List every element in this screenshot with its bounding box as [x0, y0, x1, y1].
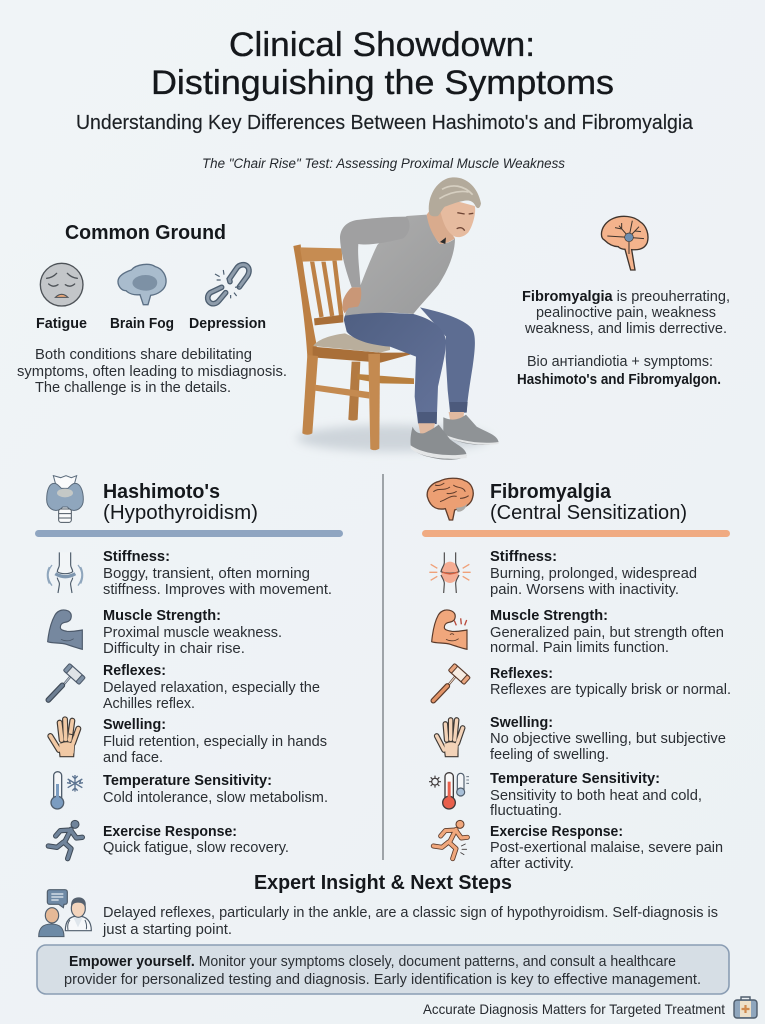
- icon: thyroid: [47, 476, 83, 522]
- heading: fibromyalgia: [490, 481, 687, 524]
- text: stiffness: Stiffness:: [103, 548, 170, 565]
- torso: [345, 215, 455, 316]
- text: fibromyalgia note: [517, 288, 730, 388]
- text: common ground description: [17, 346, 287, 396]
- text: swelling: [490, 714, 726, 763]
- row: temperature: [51, 772, 328, 809]
- text: muscle strength: normal. Pain limits function.: [490, 639, 669, 656]
- text: muscle strength: Muscle Strength:: [103, 607, 221, 624]
- text: common ground description: The challenge is in the details.: [35, 379, 231, 396]
- icon: swollen hand: [50, 719, 78, 757]
- icon: patient and doctor: [39, 890, 91, 937]
- text: stiffness: [490, 548, 697, 598]
- text: swelling: [103, 716, 327, 766]
- icon: joint: [47, 552, 83, 593]
- heading: hashimoto's: (Hypothyroidism): [103, 502, 258, 524]
- text: reflexes: Achilles reflex.: [103, 695, 195, 712]
- panel: fibromyalgia column: [422, 478, 731, 872]
- face: [439, 201, 475, 237]
- text: muscle strength: Generalized pain, but strength often: [490, 624, 724, 641]
- text: reflexes: [490, 665, 731, 698]
- label: brain fog: Brain Fog: [110, 315, 174, 332]
- label: fatigue: Fatigue: [36, 315, 87, 332]
- neck: [427, 202, 455, 244]
- icon: brain: [427, 478, 473, 520]
- text: stiffness: pain. Worsens with inactivity.: [490, 581, 679, 598]
- text: muscle strength: [103, 607, 282, 657]
- ankles: [449, 412, 464, 423]
- icon: reflex hammer: [433, 663, 470, 701]
- text: fibromyalgia note: Hashimoto's and Fibromyalgon.: [517, 371, 721, 388]
- callout: empower yourself: provider for personalized testing and diagnosis. Early identification is key to effective management.: [64, 971, 701, 988]
- panel: common ground: [17, 222, 287, 396]
- heading: hashimoto's: Hashimoto's: [103, 481, 220, 503]
- text: swelling: Swelling:: [103, 716, 166, 733]
- text: fibromyalgia note: Fibromyalgia is preouherrating,: [522, 288, 730, 305]
- icon: hand: [437, 720, 463, 757]
- text: common ground description: Both conditions share debilitating: [35, 346, 252, 363]
- icon: inflamed joint: [429, 552, 471, 593]
- row: exercise: [48, 820, 289, 859]
- label: depression: Depression: [189, 315, 266, 332]
- text: exercise: [103, 823, 289, 856]
- hand: [342, 287, 361, 313]
- row: muscle strength: [432, 607, 724, 656]
- text: fibromyalgia note: weakness, and limis derrective.: [524, 320, 727, 337]
- text: swelling: Swelling:: [490, 714, 553, 731]
- row: exercise: [433, 820, 723, 872]
- subtitle: Understanding Key Differences Between Hashimoto's and Fibromyalgia: [76, 112, 694, 134]
- colour bar: hashimoto's: [35, 530, 343, 537]
- text: reflexes: Delayed relaxation, especially the: [103, 679, 320, 696]
- text: swelling: feeling of swelling.: [490, 746, 609, 763]
- text: common ground description: symptoms, often leading to misdiagnosis.: [17, 363, 287, 380]
- text: exercise: Quick fatigue, slow recovery.: [103, 839, 289, 856]
- text: temperature: Sensitivity to both heat and cold,: [490, 787, 702, 804]
- text: stiffness: Boggy, transient, often morning: [103, 565, 310, 582]
- divider line between columns: [382, 474, 384, 860]
- text: exercise: [490, 823, 723, 872]
- icon: medical kit: [734, 997, 757, 1018]
- title: Distinguishing the Symptoms: [151, 64, 614, 102]
- row: temperature: [429, 770, 702, 819]
- text: expert insight: Delayed reflexes, particularly in the ankle, are a classic sign of hypothyroidism. Self-diagnosis is: [103, 904, 718, 921]
- text: exercise: Post-exertional malaise, severe pain: [490, 839, 723, 856]
- icon: broken chain: [208, 265, 249, 304]
- text: temperature: [103, 772, 328, 806]
- heading: fibromyalgia: (Central Sensitization): [490, 502, 687, 524]
- shoes: [443, 415, 499, 445]
- row: reflexes: [433, 663, 731, 701]
- icon: runner: [48, 820, 82, 859]
- text: exercise: Exercise Response:: [103, 823, 237, 840]
- text: temperature: Cold intolerance, slow metabolism.: [103, 789, 328, 806]
- icon: reflex hammer: [48, 663, 85, 700]
- text: swelling: and face.: [103, 749, 163, 766]
- row: swelling: [50, 716, 327, 766]
- text: reflexes: Reflexes:: [103, 662, 166, 679]
- text: stiffness: Stiffness:: [490, 548, 557, 565]
- callout: empower yourself: Empower yourself. Monitor your symptoms closely, document patterns, and consult a healthcare: [69, 953, 676, 970]
- text: reflexes: [103, 662, 320, 712]
- icon: runner with pain marks: [433, 820, 467, 859]
- chair: [293, 244, 417, 450]
- text: reflexes: Reflexes are typically brisk or normal.: [490, 681, 731, 698]
- footer note: Accurate Diagnosis Matters for Targeted Treatment: [423, 1001, 725, 1017]
- title: Clinical Showdown:: [229, 26, 535, 64]
- row: reflexes: [48, 662, 320, 712]
- caption: chair rise test: The "Chair Rise" Test: Assessing Proximal Muscle Weakness: [202, 156, 565, 171]
- icon: arm: [48, 610, 82, 649]
- text: temperature: Temperature Sensitivity:: [103, 772, 272, 789]
- row: swelling: [437, 714, 726, 763]
- icon: brain fog: [118, 264, 166, 305]
- text: expert insight: just a starting point.: [102, 921, 232, 938]
- heading: hashimoto's: [103, 481, 258, 524]
- text: swelling: Fluid retention, especially in hands: [103, 733, 327, 750]
- text: stiffness: Burning, prolonged, widespread: [490, 565, 697, 582]
- heading: common ground: Common Ground: [65, 222, 226, 244]
- text: fibromyalgia note: Bio антіandiotia + symptoms:: [527, 353, 713, 370]
- far leg: [420, 307, 475, 412]
- callout: empower yourself: [37, 945, 729, 994]
- colour bar: fibromyalgia: [422, 530, 730, 537]
- hair: [429, 177, 481, 216]
- panel: hashimoto's column: [35, 476, 343, 859]
- title: [151, 26, 614, 102]
- icon: tired face: [40, 263, 83, 306]
- icon: brain with stem: [601, 216, 648, 270]
- text: expert insight: [102, 904, 718, 938]
- icon: arm with pain marks: [432, 610, 467, 649]
- text: swelling: No objective swelling, but subjective: [490, 730, 726, 747]
- text: muscle strength: Difficulty in chair rise.: [103, 640, 245, 657]
- text: temperature: fluctuating.: [490, 802, 562, 819]
- text: temperature: [490, 770, 702, 819]
- row: stiffness: [47, 548, 332, 598]
- arm: [340, 217, 410, 287]
- icon: thermometers with sun: [429, 773, 469, 809]
- icon: thermometer with snowflake: [51, 772, 83, 809]
- row: stiffness: [429, 548, 697, 598]
- text: muscle strength: Muscle Strength:: [490, 607, 608, 624]
- near leg: [344, 311, 446, 423]
- text: exercise: after activity.: [490, 855, 574, 872]
- text: reflexes: Reflexes:: [490, 665, 553, 682]
- row: muscle strength: [48, 607, 282, 657]
- text: exercise: Exercise Response:: [490, 823, 623, 840]
- heading: expert insight: Expert Insight & Next Steps: [254, 872, 512, 894]
- text: stiffness: stiffness. Improves with movement.: [103, 581, 332, 598]
- illustration: woman rising from chair: [293, 177, 499, 460]
- text: muscle strength: [490, 607, 724, 656]
- heading: fibromyalgia: Fibromyalgia: [490, 481, 612, 503]
- text: fibromyalgia note: pealinoctive pain, weakness: [536, 304, 716, 321]
- text: temperature: Temperature Sensitivity:: [490, 770, 660, 787]
- text: stiffness: [103, 548, 332, 598]
- text: muscle strength: Proximal muscle weakness.: [103, 624, 282, 641]
